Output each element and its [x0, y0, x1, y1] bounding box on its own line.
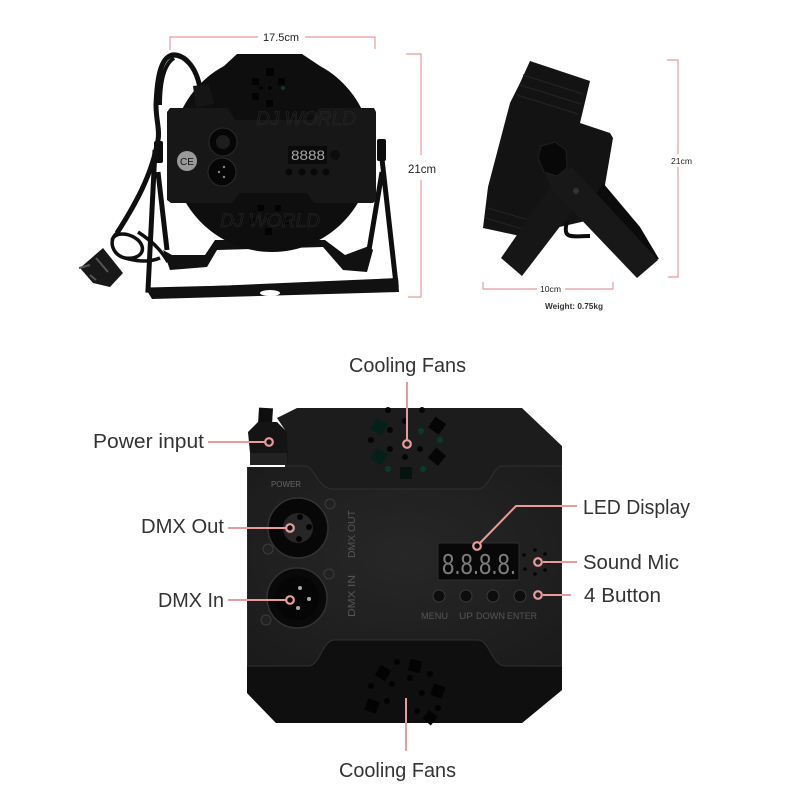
DMX labels: DMX IN	[347, 575, 358, 617]
callout line: DMX in	[228, 599, 286, 601]
housing disc	[172, 54, 372, 252]
label: four buttons: 4 Button	[584, 585, 661, 607]
microphone holes	[522, 548, 551, 576]
button labels: MENU	[421, 611, 448, 621]
CE badge	[177, 151, 197, 171]
label: DMX out: DMX Out	[141, 516, 224, 538]
cable gland	[248, 422, 288, 465]
rear bracket arm	[545, 168, 658, 278]
bracket slots	[260, 290, 280, 296]
dimension: height 21cm: 21cm	[408, 164, 436, 176]
mounting bracket	[146, 139, 399, 299]
callout labels	[93, 355, 690, 782]
buttons	[286, 168, 330, 176]
power cable and plug	[79, 55, 214, 287]
label: power input: Power input	[93, 431, 204, 453]
DMX In socket	[267, 568, 327, 628]
dimension: depth 10cm: 10cm	[540, 284, 561, 294]
front view of light	[79, 54, 399, 299]
callout line: power input	[208, 441, 265, 443]
housing ribs	[486, 75, 583, 230]
label: top cooling fans: Cooling Fans	[349, 355, 466, 377]
button labels	[421, 611, 537, 621]
label: bottom cooling fans: Cooling Fans	[339, 760, 456, 782]
dimension: width 17.5cm	[170, 32, 375, 50]
callout line: DMX out	[228, 527, 286, 529]
DMX Out socket	[268, 498, 328, 558]
button labels: ENTER	[507, 611, 537, 621]
rear bracket strip	[590, 183, 659, 262]
front bracket arm	[501, 183, 578, 276]
callouts	[208, 382, 577, 751]
cable	[265, 408, 266, 425]
watermarks: DJ WORLD	[220, 211, 320, 232]
screw	[573, 188, 579, 194]
label: sound mic: Sound Mic	[583, 552, 679, 574]
dimension: width 17.5cm: 17.5cm	[263, 32, 299, 44]
dimension: depth 10cm	[483, 282, 613, 294]
control panel	[247, 466, 562, 666]
lower housing	[247, 640, 562, 723]
callout line: LED display	[479, 506, 577, 544]
rear control box	[167, 108, 376, 203]
label: LED display: LED Display	[583, 497, 690, 519]
POWER label: POWER	[271, 479, 301, 489]
DMX labels	[347, 510, 358, 617]
weight: Weight: 0.75kg	[545, 301, 603, 311]
gland collar	[250, 453, 287, 465]
dimension: side height 21cm	[667, 60, 692, 277]
mounting knob	[538, 142, 567, 176]
side housing	[483, 61, 613, 236]
watermarks: DJ WORLD	[256, 109, 356, 130]
bracket hole	[262, 252, 274, 258]
callout line: four buttons	[543, 594, 571, 596]
callout line: sound mic	[543, 561, 577, 563]
dimension: side height 21cm: 21cm	[671, 156, 692, 166]
LED display: 8.8.8.8.	[442, 549, 516, 581]
DMX in socket	[208, 158, 236, 186]
button labels: DOWN	[476, 611, 505, 621]
callout line: top cooling fans	[406, 382, 408, 440]
CE badge: CE	[180, 157, 194, 168]
cable loop	[566, 222, 590, 236]
callout line: bottom cooling fans	[405, 698, 407, 751]
housing	[240, 400, 570, 730]
callout dots	[265, 438, 542, 604]
four buttons	[433, 590, 526, 602]
mic holes	[330, 150, 340, 160]
lower fan holes	[250, 205, 289, 235]
upper fan holes	[252, 68, 285, 107]
mounting screws	[261, 499, 335, 625]
close-up of rear panel	[240, 400, 570, 730]
bottom fan holes	[364, 659, 446, 725]
DMX labels: DMX OUT	[347, 510, 358, 558]
button labels: UP	[459, 611, 473, 621]
side view of light	[483, 61, 659, 278]
label: DMX in: DMX In	[158, 590, 224, 612]
DMX out socket	[209, 128, 237, 156]
watermarks	[220, 109, 356, 232]
display: 8888	[291, 147, 325, 163]
top fan holes	[368, 407, 446, 479]
LED display	[438, 543, 519, 581]
dimension: height 21cm	[406, 54, 436, 297]
